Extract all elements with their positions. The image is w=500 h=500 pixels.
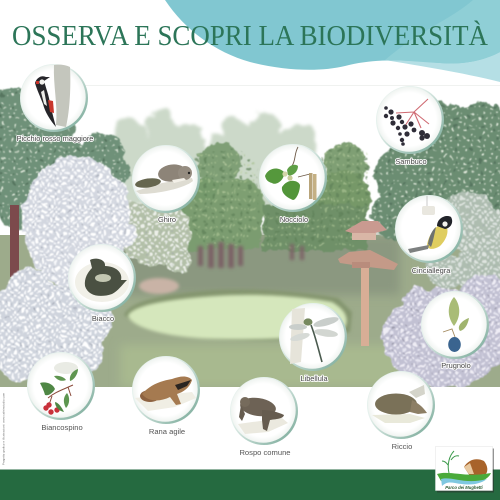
far background trees [114,112,317,215]
label: Libellula [300,374,328,383]
label: Nocciolo [280,215,308,224]
white flowering bush [22,156,136,288]
icon: dragonfly [289,308,339,364]
icon: agile frog [135,376,196,411]
icon: coiled snake [75,259,129,302]
central pale shrub [118,198,192,272]
credit line: Progetto grafico e illustrazioni: www.cafeinstudio.com [2,392,6,465]
label: Prugnolo [441,361,471,370]
right dark tree [371,102,500,239]
meadow [0,235,500,387]
label: Rospo comune [239,448,291,457]
badge: Rospo comune [230,377,298,457]
label: Picchio rosso maggiore [17,134,93,143]
lilac blackthorn bush [383,275,500,388]
icon: elderberries [384,99,430,146]
badge: Sambuco [376,86,444,166]
label: Biancospino [41,423,83,432]
icon: lily of the valley [442,451,459,473]
icon: dormouse [135,163,193,194]
bottom green band [0,470,500,500]
stone pile [139,278,179,294]
badge: Nocciolo [259,144,327,224]
label: Rana agile [149,427,185,436]
icon: hazel leaves [265,147,316,200]
icon: hawthorn [40,362,78,415]
decorative header waves [165,0,500,82]
badge: Libellula [279,303,347,383]
icon: blackthorn [443,297,469,352]
badge: Cinciallegra [395,195,463,275]
left dark tree [0,88,131,229]
icon: green and blue waves [437,473,491,483]
icon: great tit [408,196,452,253]
icon: woodpecker on trunk [35,65,70,127]
badge: Riccio [367,371,435,451]
bottom white strip [0,387,500,469]
right pale bush [427,192,500,298]
icon: hedgehog [464,459,487,476]
label: Biacco [92,314,114,323]
label: Cinciallegra [412,266,451,275]
badge: Prugnolo [421,291,489,370]
badge: Rana agile [132,356,200,436]
icon: common toad [238,396,288,434]
tree texture [188,145,370,246]
middle green trees [179,143,370,250]
pond rim [124,289,352,340]
badge: Biacco [68,244,136,323]
icon: hedgehog [372,385,427,423]
label: Sambuco [395,157,427,166]
logo: Parco dei Mughetti [436,446,494,492]
tree trunks [198,242,304,268]
badge: Ghiro [132,145,200,224]
birdhouse on post [338,221,398,346]
badge: Picchio rosso maggiore [17,64,93,143]
label: Ghiro [158,215,176,224]
logo text: Parco dei Mughetti [445,485,484,490]
landscape illustration [0,88,500,388]
pond [128,295,347,339]
badge: Biancospino [27,352,95,432]
label: Riccio [392,442,412,451]
lower white bush [0,268,113,382]
header divider [85,85,500,86]
